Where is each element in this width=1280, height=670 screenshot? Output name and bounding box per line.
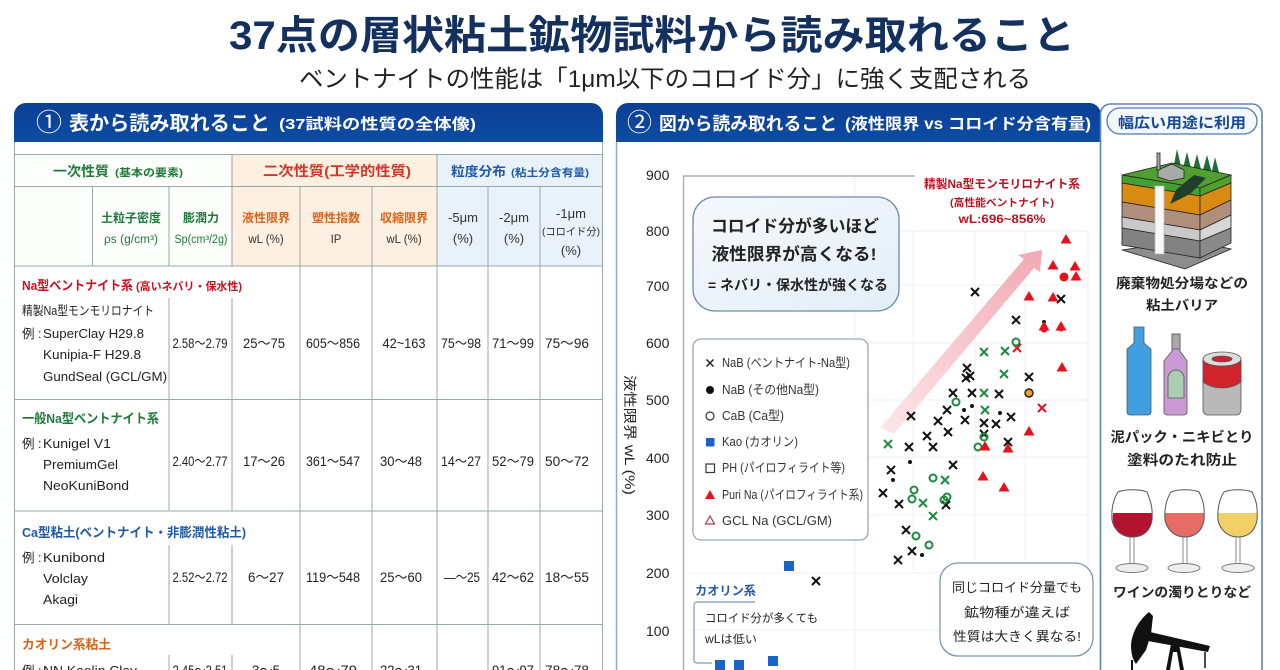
table header bar [14,103,603,142]
label: mud pack and paint: 泥パック・ニキビとり [1110,429,1254,445]
label: landfill: 廃棄物処分場などの [1116,275,1248,291]
row: general Na bentonite [22,411,589,493]
label: wine: ワインの濁りとりなど [1113,584,1252,600]
legend: NaB (ベントナイト-Na型) [722,356,850,370]
column headers: -2μm [499,210,529,225]
y axis tick labels: 300 [646,507,670,523]
callout: mineral type differences [940,563,1093,656]
chart header bar: ② [627,109,652,137]
callout: more colloid higher liquid limit: = ネバリ・保水性が強くなる [708,277,888,293]
column headers: 収縮限界 [380,210,428,225]
row: refined Na bentonite: 75～98 [441,336,481,351]
icon: oil pump jack [1131,612,1210,670]
column headers: -5μm [448,210,478,225]
row: kaolin clay [22,637,589,670]
y axis tick labels: 800 [646,223,670,239]
column headers: (%) [561,243,581,258]
group header: particle size: (粘土分含有量) [511,166,589,179]
row: Ca clay: 2.52～2.72 [172,570,228,585]
y axis tick labels: 600 [646,335,670,351]
row: general Na bentonite: 361～547 [306,454,360,469]
callout: mineral type differences: 同じコロイド分量でも [952,580,1082,595]
row: refined Na bentonite: 75～96 [545,336,589,351]
column headers: 土粒子密度 [101,210,161,225]
y axis title: 液性限界 wL (%) [622,375,637,495]
column headers: 塑性指数 [312,210,360,225]
column headers: (%) [453,231,473,246]
row: Ca clay: Ca型粘土(ベントナイト・非膨潤性粘土) [22,525,246,540]
row: Ca clay: Volclay [43,572,89,586]
panel: table [14,103,603,670]
row: Ca clay: 119～548 [306,570,360,585]
label: mud pack and paint: 塗料のたれ防止 [1127,452,1237,468]
callout: mineral type differences: 鉱物種が違えば [964,605,1070,620]
table grid [14,142,602,670]
data points [715,234,1082,670]
callout: more colloid higher liquid limit: 液性限界が高くなる! [712,244,876,264]
column headers: (%) [504,231,524,246]
column headers: ρs (g/cm³) [104,234,158,246]
column headers: -1μm [556,206,586,221]
label: landfill: 粘土バリア [1146,297,1218,313]
row: general Na bentonite: 17～26 [243,454,285,469]
subtitle: ベントナイトの性能は「1μm以下のコロイド分」に強く支配される [299,66,1031,93]
column headers: Sp(cm³/2g) [174,234,228,246]
row: general Na bentonite: 50～72 [545,454,589,469]
group header: particle size: 粒度分布 [451,164,506,179]
group header: primary properties: (基本の要素) [115,166,183,179]
row: Ca clay: 25～60 [380,570,422,585]
icon: cosmetic bottles and paint can [1127,327,1241,415]
row: refined Na bentonite: 精製Na型モンモリロナイト [22,304,154,318]
icon: rose wine glass [1165,490,1204,572]
row: refined Na bentonite: Kunipia-F H29.8 [43,348,141,362]
plot grid and axes [684,176,1088,670]
icon: red wine glass [1112,490,1152,572]
legend: GCL Na (GCL/GM) [722,514,832,528]
row: Ca clay: 6～27 [248,570,284,585]
row: general Na bentonite: Kunigel V1 [43,437,111,451]
label: landfill [1116,275,1248,313]
legend: NaB (その他Na型) [722,383,819,397]
row: refined Na bentonite: SuperClay H29.8 [43,327,144,341]
callout: kaolin: カオリン系 [695,583,756,598]
column headers: 液性限界 [242,210,290,225]
column headers: wL (%) [247,234,284,246]
icon: white wine glass [1218,490,1257,572]
row: general Na bentonite: NeoKuniBond [43,479,129,493]
group header: particle size [451,164,589,179]
row: general Na bentonite: 14～27 [441,454,481,469]
group header: primary properties: 一次性質 [53,163,109,179]
row: general Na bentonite: 52～79 [492,454,534,469]
y axis tick labels: 100 [646,623,670,639]
row: refined Na bentonite: 71～99 [492,336,534,351]
callout: kaolin: コロイド分が多くても [705,611,818,625]
row: Ca clay: Kunibond [43,551,105,565]
row: refined Na bentonite: Na型ベントナイト系 [22,278,133,293]
applications heading pill: 幅広い用途に利用 [1118,115,1246,132]
panel border [616,142,618,670]
applications heading pill [1107,108,1257,134]
callout: refined montmorillonite label: (高性能ベントナイト) [950,196,1054,209]
callout: kaolin [694,583,818,663]
icon: wine glasses [1112,490,1257,572]
row: Ca clay: 例 : [22,551,41,565]
row: kaolin clay: カオリン系粘土 [22,637,111,652]
column headers: IP [331,234,342,246]
row: general Na bentonite: 例 : [22,437,41,451]
y axis tick labels: 700 [646,278,670,294]
panel: scatter chart [616,103,1101,670]
callout: refined montmorillonite label: 精製Na型モンモリロナイト系 [924,176,1080,191]
legend: Puri Na (パイロフィライト系) [722,488,863,502]
y axis tick labels: 500 [646,392,670,408]
trend arrow [880,250,1042,434]
legend [693,339,868,540]
row: Ca clay [22,525,589,607]
column headers: wL (%) [385,234,422,246]
row: refined Na bentonite: 25～75 [243,336,285,351]
chart header bar: 図から読み取れること [659,114,837,134]
row: Ca clay: 42～62 [492,570,534,585]
panel: applications [1100,104,1262,670]
chart header bar [616,103,1101,142]
y axis tick labels [646,167,670,639]
y axis tick labels: 900 [646,167,670,183]
row: refined Na bentonite: 例 : [22,327,41,341]
row: refined Na bentonite: 42~163 [382,336,426,351]
icon: landfill clay barrier [1122,149,1231,269]
label: mud pack and paint [1110,429,1254,468]
callout: refined montmorillonite label: wL:696~856% [957,212,1046,226]
row: refined Na bentonite [22,278,589,384]
panel frame [1100,104,1262,670]
y axis tick labels: 200 [646,565,670,581]
callout: kaolin: wLは低い [704,633,757,646]
legend: Kao (カオリン) [722,435,798,449]
table header bar: (37試料の性質の全体像) [279,115,476,133]
row: Ca clay: Akagi [43,593,78,607]
column headers: (コロイド分) [542,226,600,238]
chart header bar: (液性限界 vs コロイド分含有量) [845,114,1091,133]
group header: primary properties [53,163,183,179]
column headers: 膨潤力 [183,210,219,225]
row: general Na bentonite: 2.40～2.77 [172,454,228,469]
y axis tick labels: 400 [646,450,670,466]
row: refined Na bentonite: (高いネバリ・保水性) [136,279,242,293]
callout: mineral type differences: 性質は大きく異なる! [953,629,1081,644]
row: refined Na bentonite: 605～856 [306,336,360,351]
row: Ca clay: —～25 [444,570,480,585]
row: refined Na bentonite: GundSeal (GCL/GM) [43,370,167,384]
callout: more colloid higher liquid limit: コロイド分が多いほど [711,216,879,236]
row: refined Na bentonite: 2.58～2.79 [172,336,228,351]
callout: refined montmorillonite label [924,176,1080,226]
column headers [101,206,600,258]
row: general Na bentonite: 30～48 [380,454,422,469]
table header background tint [15,154,602,266]
legend: PH (パイロフィライト等) [722,460,845,475]
table header bar: ① [36,109,62,137]
row: Ca clay: 18～55 [545,570,589,585]
title: 37点の層状粘土鉱物試料から読み取れること [229,14,1075,58]
callout: more colloid higher liquid limit [693,197,899,311]
group header: secondary properties: 二次性質(工学的性質) [263,163,411,179]
legend: CaB (Ca型) [722,409,784,423]
row: general Na bentonite: PremiumGel [43,458,118,472]
row: general Na bentonite: 一般Na型ベントナイト系 [22,411,159,426]
table header bar: 表から読み取れること [69,112,270,135]
